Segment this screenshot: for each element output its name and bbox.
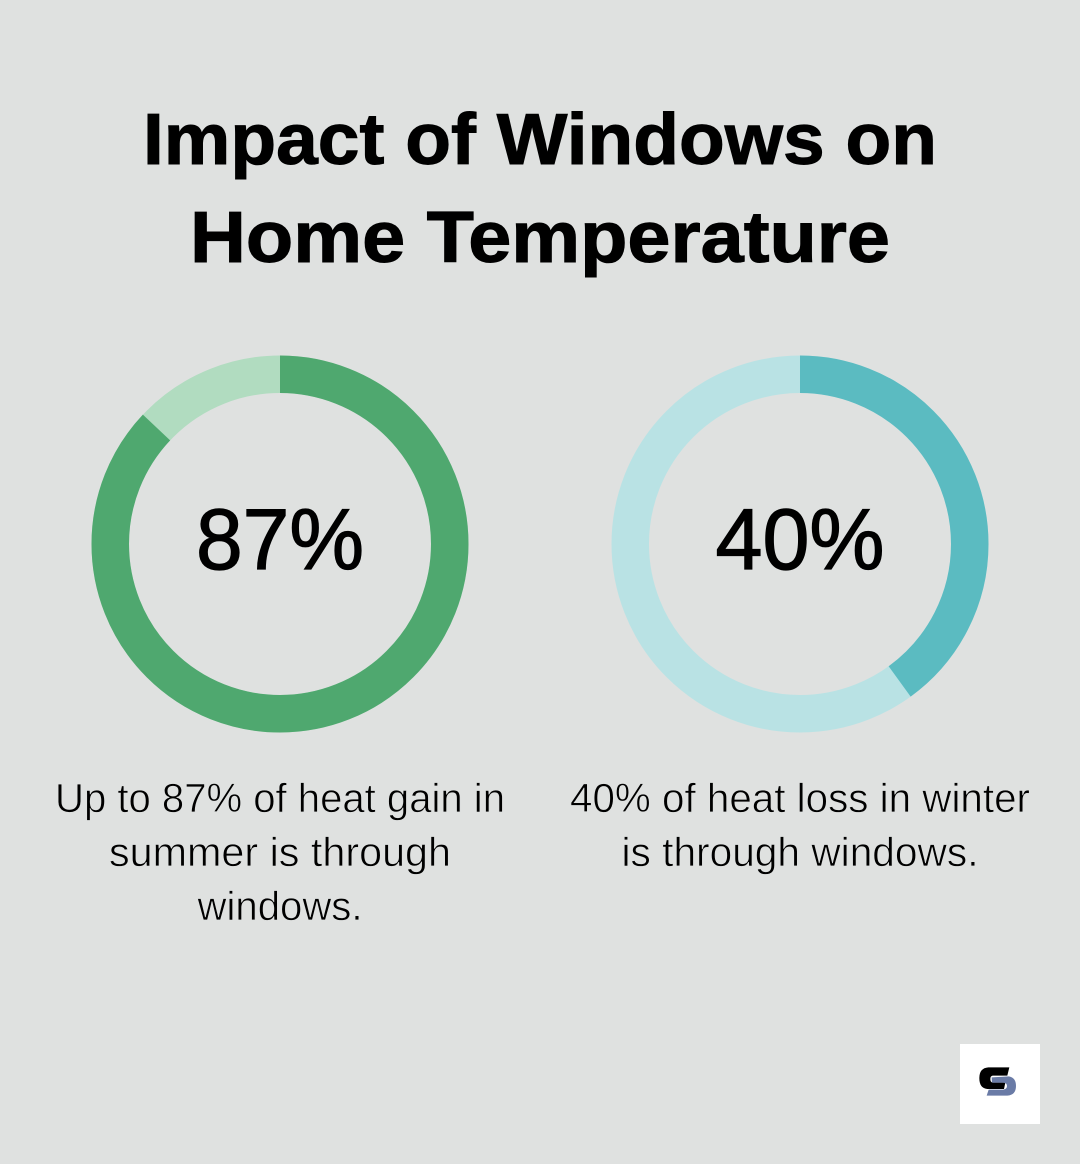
panel: summer heat gain <box>55 374 505 929</box>
panel: winter heat loss <box>570 374 1030 875</box>
value: 87%: 87% <box>196 492 364 588</box>
title <box>143 100 937 278</box>
title: Impact of Windows on <box>143 100 937 180</box>
text: winter description: is through windows. <box>622 829 978 875</box>
text: summer description: windows. <box>197 883 362 929</box>
donut chart: 40% <box>630 374 970 714</box>
text: summer description <box>55 775 505 929</box>
logo badge <box>960 1044 1040 1124</box>
text: summer description: Up to 87% of heat gain in <box>55 775 505 821</box>
text: summer description: summer is through <box>109 829 451 875</box>
title: Home Temperature <box>190 198 890 278</box>
text: winter description: 40% of heat loss in winter <box>570 775 1030 821</box>
value: 40%: 40% <box>716 492 884 588</box>
text: winter description <box>570 775 1030 875</box>
icon: logo mark <box>979 1067 1016 1096</box>
donut chart: 87% <box>110 374 450 714</box>
